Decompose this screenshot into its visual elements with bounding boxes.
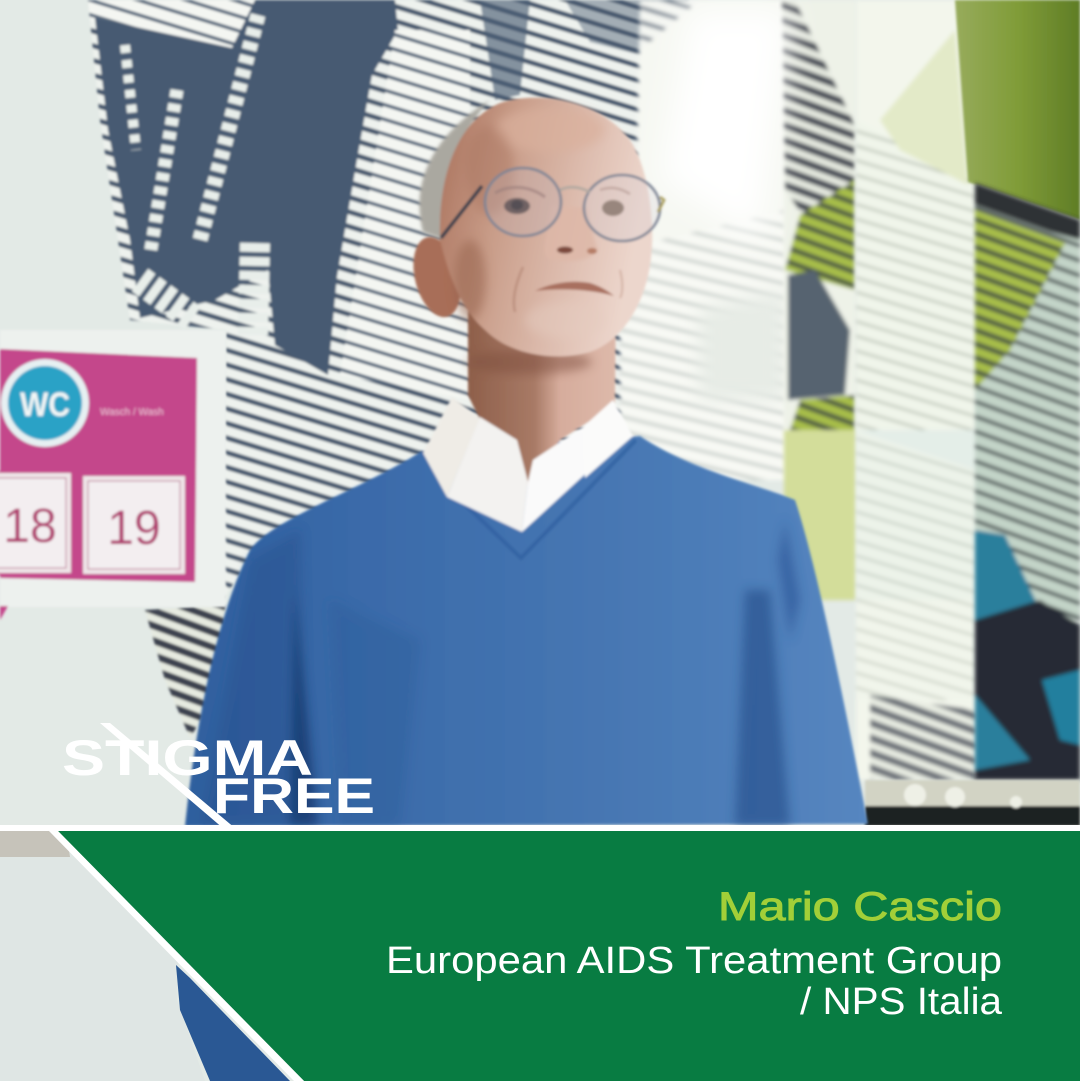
icon: WC circle — [1, 359, 89, 447]
wrinkles — [514, 267, 523, 312]
white horizontal rule above banner — [0, 825, 1080, 831]
mural: dark and blue pane right — [975, 183, 1080, 780]
affiliation: / NPS Italia — [800, 981, 1003, 1023]
mural: sunlit pane — [620, 0, 790, 480]
hair — [420, 100, 490, 240]
sweater V neck rib — [423, 440, 636, 558]
shirt and collar — [423, 397, 633, 532]
photo: man in blue sweater — [185, 98, 868, 826]
glare — [660, 10, 790, 240]
mouth — [535, 282, 614, 296]
sweater folds — [200, 520, 800, 826]
logo: Stigma Free: STIGMA — [62, 730, 313, 786]
number box 18: 18 — [3, 500, 57, 553]
number box 19: 19 — [107, 502, 161, 555]
name: Mario Cascio — [718, 885, 1002, 929]
white dashes in dark shape — [125, 15, 258, 335]
sign: pink room sign with WC and numbers: Wasch / Wash — [100, 407, 164, 418]
number box 18 — [0, 472, 72, 574]
lower mural patch — [145, 605, 225, 738]
head — [440, 98, 652, 356]
mural: dark and lime pane — [782, 0, 856, 600]
facial shading — [454, 108, 605, 338]
shelf under mural — [865, 780, 1080, 826]
white diagonal line — [49, 831, 304, 1081]
mural: pale centre pane — [856, 0, 976, 780]
sweater — [185, 436, 868, 826]
jaw shadow — [468, 350, 592, 374]
eyes — [504, 198, 530, 214]
affiliation — [386, 940, 1003, 1023]
bottom-left wall area — [0, 831, 205, 1081]
mural: olive panel top right — [955, 0, 1080, 220]
icon: WC circle: WC — [20, 386, 70, 424]
mural: striped artwork left of the man — [88, 0, 690, 600]
nose — [545, 205, 598, 261]
green banner panel — [58, 831, 1080, 1081]
affiliation: European AIDS Treatment Group — [386, 940, 1002, 982]
logo: Stigma Free — [62, 723, 375, 829]
glasses — [441, 168, 664, 241]
sign: pink room sign with WC and numbers — [0, 330, 226, 620]
ear — [406, 232, 468, 322]
number box 19 — [82, 475, 186, 575]
pale wash over pane — [700, 290, 785, 400]
logo: Stigma Free: FREE — [213, 768, 375, 824]
neck — [468, 300, 616, 485]
